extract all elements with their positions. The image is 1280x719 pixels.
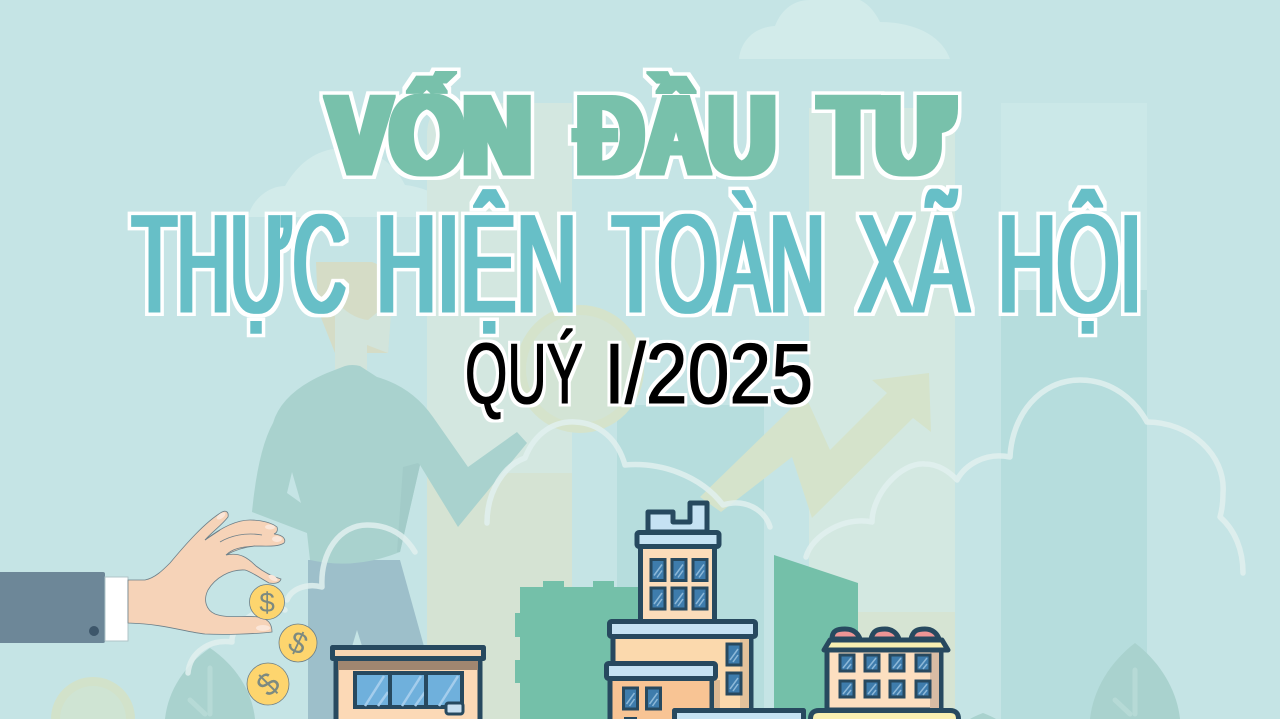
hotel building — [810, 629, 958, 719]
background bar: pale green left — [427, 103, 572, 719]
title line 1: ĐẦU — [577, 72, 775, 200]
background leaf: small — [970, 713, 996, 719]
central tower building — [606, 503, 804, 719]
suit sleeve — [0, 572, 105, 643]
background coin: lower left — [51, 677, 135, 719]
coin: held — [250, 584, 284, 620]
title line 2 — [132, 185, 1142, 342]
cloud outline: centre — [487, 422, 770, 527]
coin: held: $ — [259, 587, 275, 618]
green castle building — [515, 581, 700, 719]
title line 2: TOÀN — [612, 185, 825, 342]
background cloud: top — [739, 0, 950, 59]
title line 1: TƯ — [820, 72, 952, 200]
hand — [128, 511, 285, 634]
coin: falling middle: $ — [283, 625, 313, 662]
background bar: teal centre — [617, 405, 764, 719]
background leaf: right — [1090, 643, 1180, 719]
title line 1: VỐN — [328, 72, 531, 200]
title line 2: THỰC — [132, 185, 346, 342]
title — [132, 72, 1142, 422]
cloud outline: left — [188, 525, 415, 673]
green slanted building — [774, 555, 858, 719]
title line 3: period — [465, 327, 813, 422]
title line 1 — [328, 72, 952, 200]
background leaf: left — [165, 648, 255, 719]
title line 2: XÃ — [858, 185, 969, 342]
title line 3: period: I/2025 — [604, 327, 813, 422]
background bar: tall right — [1001, 103, 1147, 719]
person silhouette — [252, 262, 527, 719]
shirt cuff — [105, 577, 128, 641]
title line 2: HIỆN — [376, 185, 577, 342]
growth arrow — [700, 373, 931, 518]
shop building — [332, 648, 484, 719]
background bar: pale green right — [809, 108, 955, 719]
title line 3: period: QUÝ — [465, 327, 583, 422]
background cloud: left — [248, 148, 456, 217]
title line 2: HỘI — [998, 185, 1142, 342]
cloud outline: right — [806, 380, 1243, 573]
coin: falling lower: $ — [249, 665, 287, 703]
background coin: centre — [516, 305, 644, 433]
